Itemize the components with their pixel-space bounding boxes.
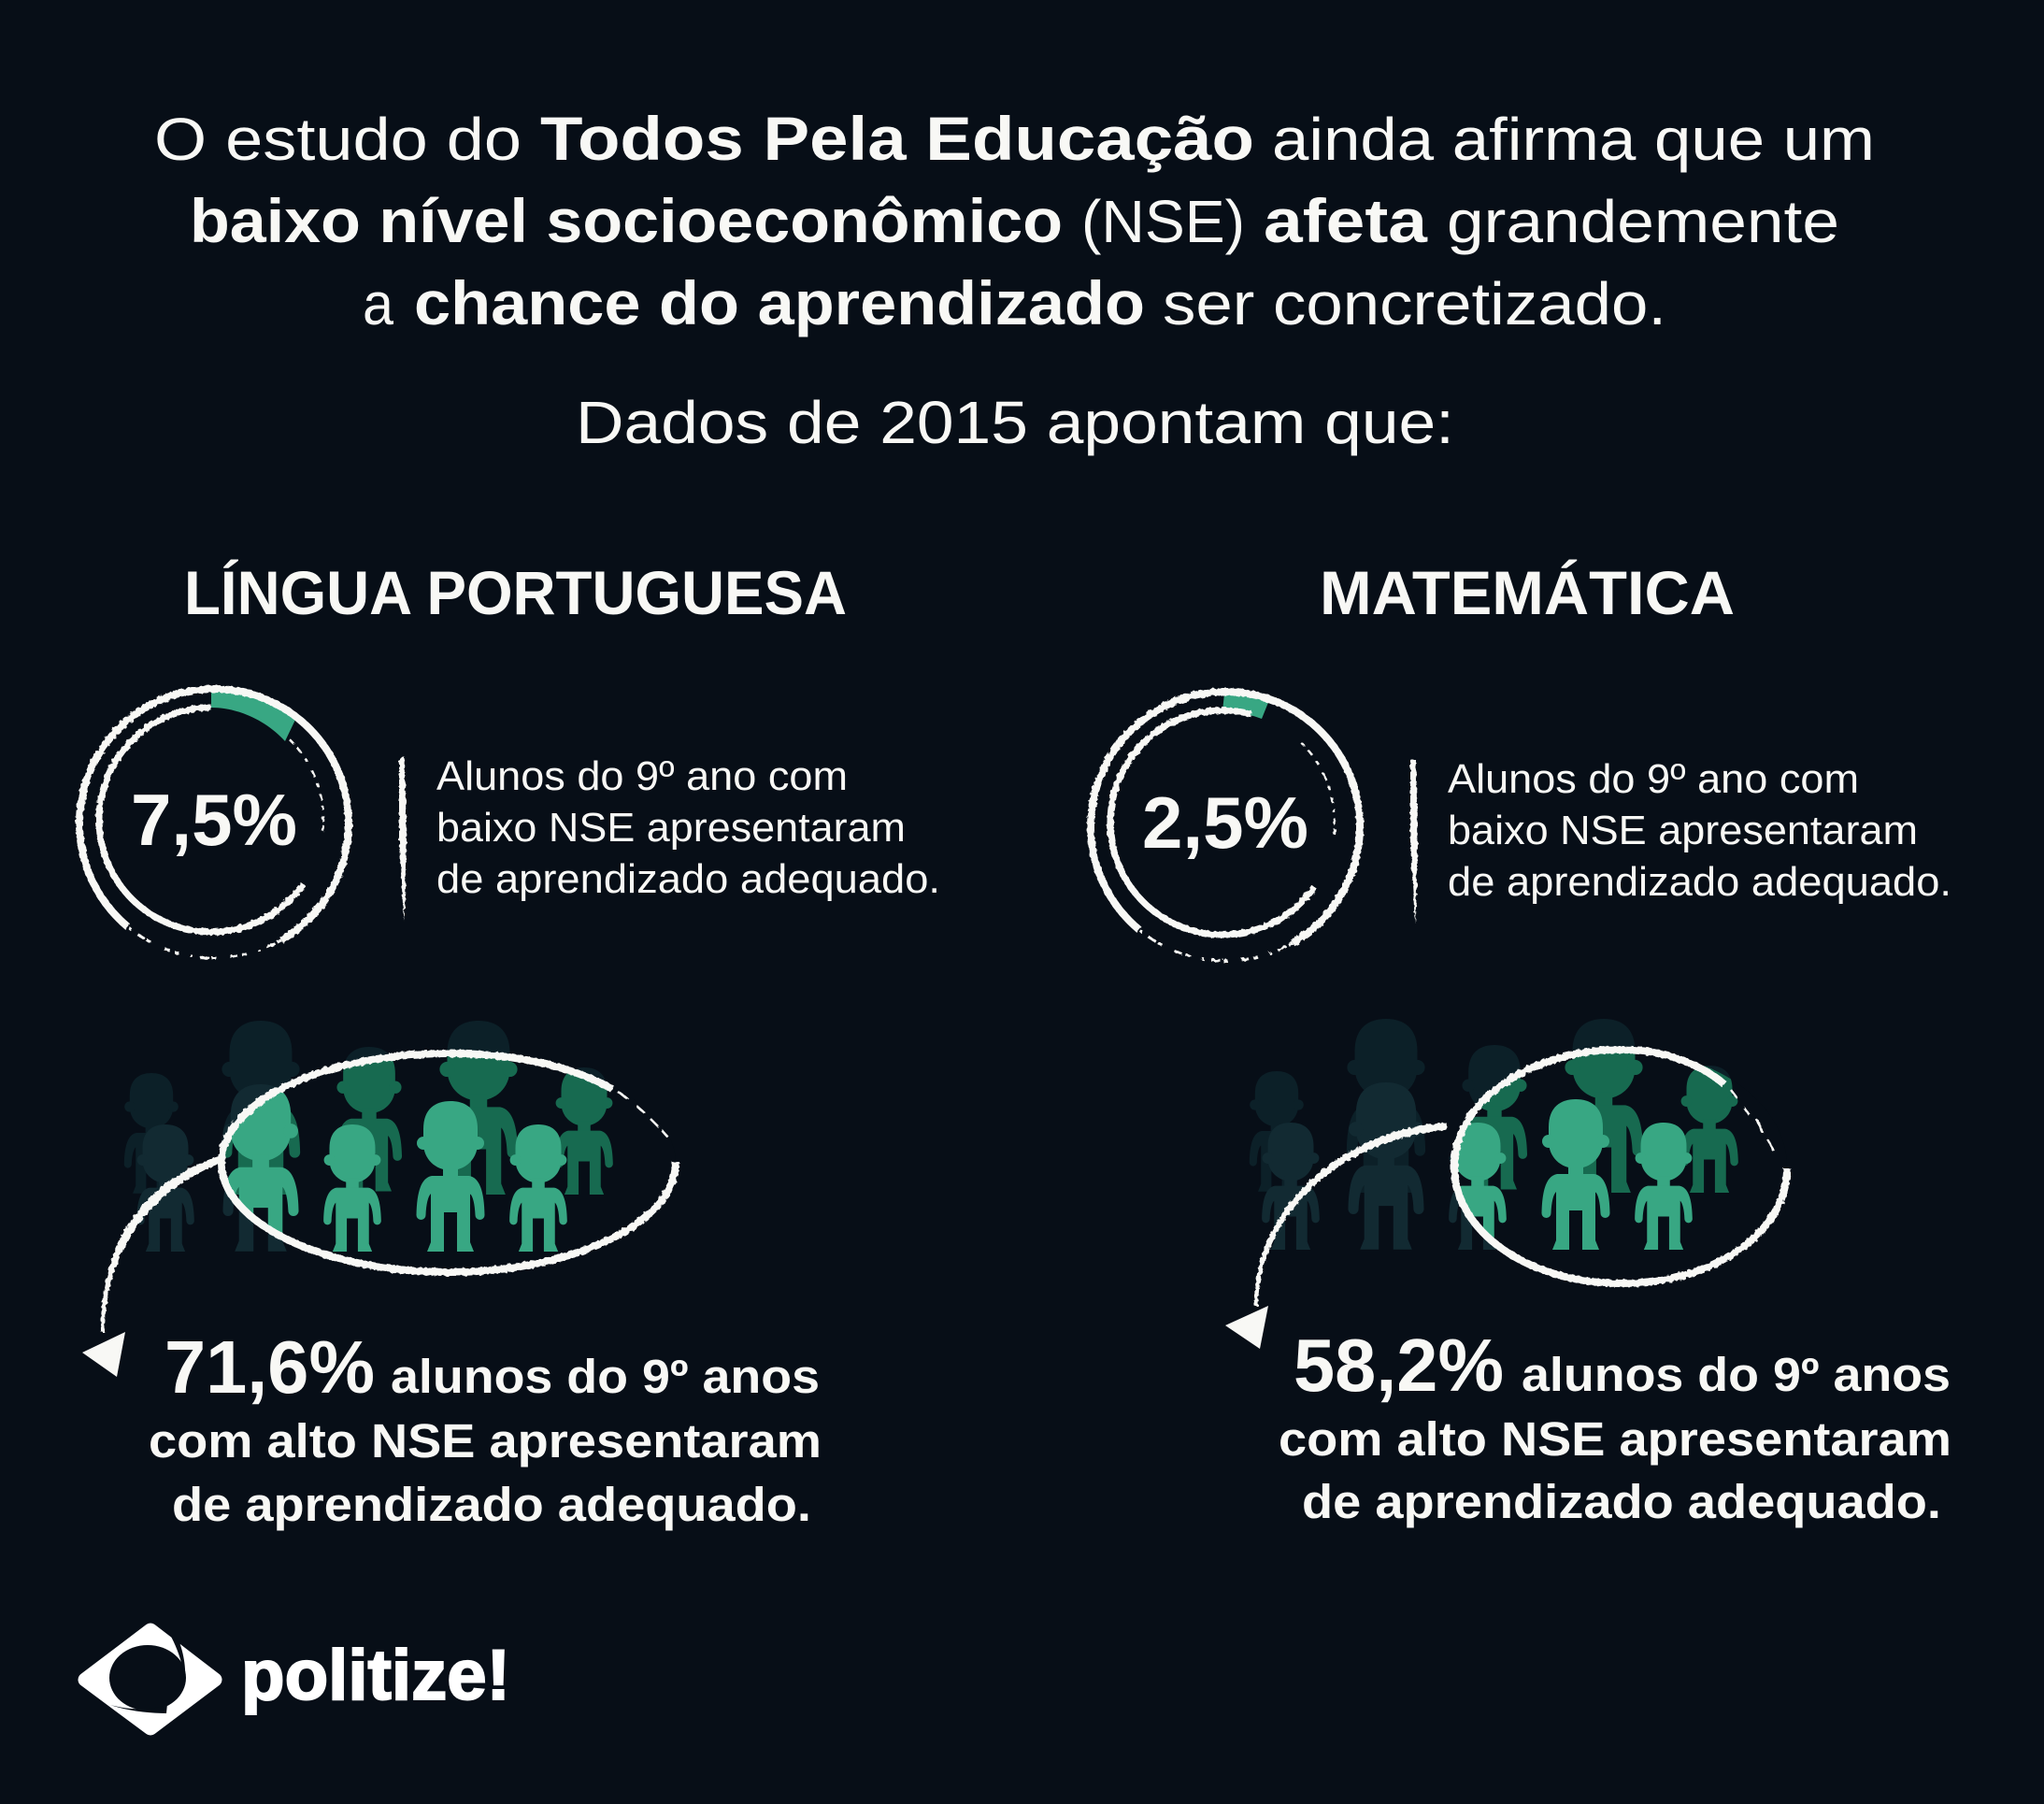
text: baixo NSE matemática [1448, 756, 1951, 905]
value 2,5%: 2,5% [1142, 781, 1308, 864]
text: baixo NSE matemática: Alunos do 9º ano com [1448, 756, 1859, 802]
subheading: dados de 2015: Dados de 2015 apontam que: [576, 389, 1454, 456]
arrow: ellipse to 58,2% [1225, 1123, 1447, 1349]
divider stroke [1410, 760, 1418, 923]
text: alto NSE matemática [1279, 1324, 1951, 1528]
green segment 7,5% [211, 692, 295, 741]
heading line 1: Todos Pela Educação [540, 104, 1254, 173]
text: alto NSE língua portuguesa: alunos do 9º anos [391, 1350, 820, 1403]
heading line 3: a [363, 270, 393, 337]
highlight ellipse [1454, 1050, 1787, 1283]
green segment 2,5% [1222, 694, 1269, 719]
pictogram: students, 58,2% highlighted [1250, 1019, 1738, 1250]
text: alto NSE língua portuguesa: de aprendizado adequado. [172, 1478, 811, 1531]
heading line 3: ser concretizado. [1163, 270, 1666, 337]
highlight ellipse [222, 1053, 676, 1272]
logo: politize! [85, 1630, 510, 1728]
text: baixo NSE língua portuguesa [436, 753, 940, 902]
text: baixo NSE língua portuguesa: baixo NSE apresentaram [436, 805, 906, 851]
heading line 2: (NSE) [1081, 188, 1245, 255]
heading line 3 [363, 268, 1666, 337]
donut chart: 7,5% [24, 634, 404, 1013]
text: alto NSE língua portuguesa: 71,6% [164, 1325, 375, 1409]
column heading: língua portuguesa: LÍNGUA PORTUGUESA [184, 558, 847, 627]
text: alto NSE matemática: 58,2% [1294, 1324, 1504, 1407]
text: baixo NSE matemática: baixo NSE apresentaram [1448, 808, 1918, 853]
column heading: matemática: MATEMÁTICA [1320, 558, 1735, 627]
heading line 1: ainda afirma que um [1272, 106, 1875, 173]
text: alto NSE matemática: alunos do 9º anos [1522, 1348, 1951, 1401]
panel: língua portuguesa [24, 558, 940, 1531]
text: baixo NSE língua portuguesa: de aprendizado adequado. [436, 856, 940, 902]
text: alto NSE matemática: de aprendizado adequado. [1302, 1475, 1941, 1528]
text: baixo NSE matemática: de aprendizado adequado. [1448, 859, 1951, 905]
heading line 1: O estudo do [154, 106, 522, 173]
heading line 1 [154, 104, 1875, 173]
heading line 2: baixo nível socioeconômico [190, 186, 1063, 255]
text: alto NSE língua portuguesa [149, 1325, 822, 1531]
heading: intro statement [154, 104, 1875, 337]
divider stroke [399, 757, 407, 921]
donut chart: 2,5% [1036, 637, 1415, 1016]
panel: matemática [1036, 558, 1951, 1528]
heading line 2: grandemente [1447, 188, 1839, 255]
logo mark [85, 1630, 215, 1728]
heading line 2: afeta [1264, 186, 1428, 255]
logo wordmark: politize! [241, 1636, 510, 1715]
heading line 2 [190, 186, 1839, 255]
value 7,5%: 7,5% [131, 779, 297, 861]
text: baixo NSE língua portuguesa: Alunos do 9º ano com [436, 753, 848, 799]
pictogram: students, 71,6% highlighted [124, 1021, 613, 1252]
arrow: ellipse to 71,6% [82, 1155, 222, 1377]
text: alto NSE língua portuguesa: com alto NSE apresentaram [149, 1414, 822, 1468]
text: alto NSE matemática: com alto NSE apresentaram [1279, 1412, 1951, 1466]
heading line 3: chance do aprendizado [414, 268, 1145, 337]
